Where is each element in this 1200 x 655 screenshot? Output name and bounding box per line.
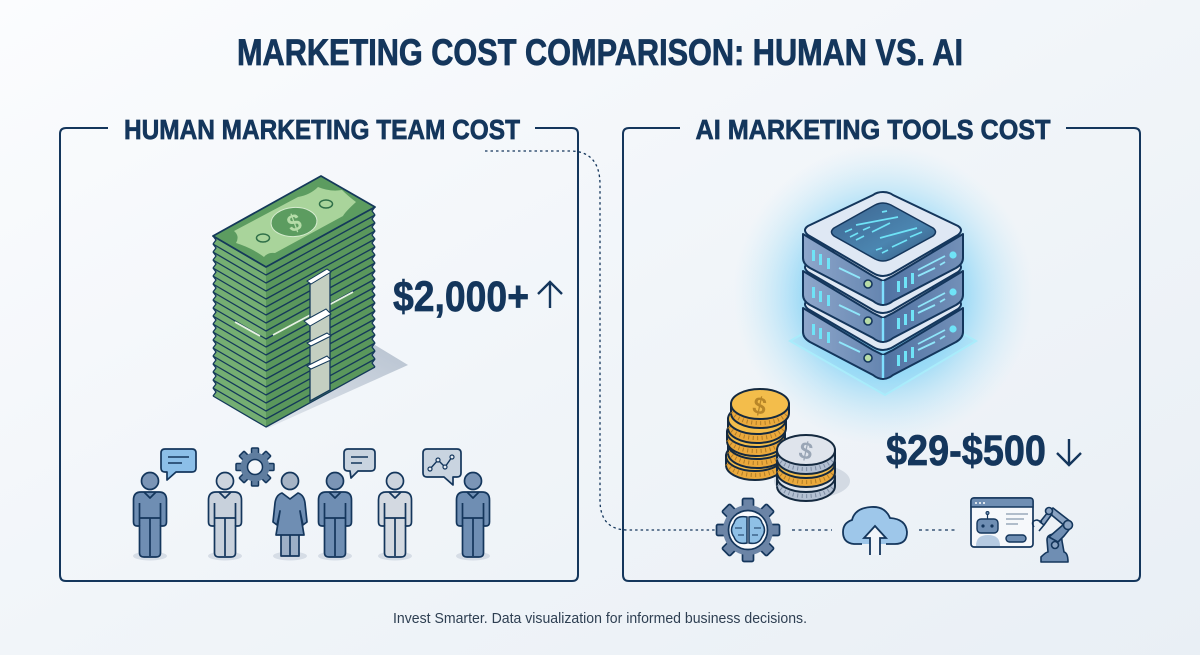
illustration: stack of dollar bills: $ (284, 208, 306, 238)
person 4 (318, 472, 352, 557)
dotted connector between panels (485, 151, 715, 530)
person 1 (134, 472, 166, 557)
heading: human marketing team cost: HUMAN MARKETING TEAM COST (124, 114, 520, 145)
icon: robot arm (1033, 508, 1072, 562)
illustration: server stack (803, 192, 963, 379)
value: $2,000+: $2,000+ (393, 273, 529, 321)
title: MARKETING COST COMPARISON: HUMAN VS. AI (237, 32, 963, 73)
speech bubble: grey (344, 449, 375, 478)
icon: up arrow (538, 282, 562, 308)
person 5 (378, 472, 412, 557)
icon: down arrow (1057, 439, 1081, 465)
footer caption: Invest Smarter. Data visualization for informed business decisions. (393, 610, 807, 627)
person 6 (456, 472, 490, 557)
connector: cloud to robot (919, 529, 958, 531)
illustration: stack of dollar bills (213, 176, 408, 428)
icon: cloud upload (843, 507, 907, 555)
panel: human marketing team cost (60, 114, 578, 581)
illustration: gold and silver coins (726, 389, 835, 501)
speech bubble: blue (161, 449, 196, 480)
icon: robot browser window (971, 498, 1033, 547)
blue glow (733, 145, 1033, 445)
platform outline (790, 288, 976, 395)
icon: gear (236, 448, 274, 486)
illustration: gold and silver coins: $ (750, 392, 769, 421)
server screen (832, 203, 936, 261)
coin shadow (774, 464, 850, 498)
value: $29-$500: $29-$500 (886, 427, 1046, 475)
connector: brain to cloud (792, 529, 832, 531)
speech bubble: line chart (423, 449, 461, 485)
icon: AI brain gear (716, 498, 780, 562)
panel: AI marketing tools cost (623, 114, 1140, 581)
heading: AI marketing tools cost: AI MARKETING TOOLS COST (696, 114, 1050, 145)
person 3 (273, 472, 307, 556)
team of people (133, 448, 490, 560)
person 2 (208, 472, 242, 557)
illustration: gold and silver coins: $ (796, 437, 816, 466)
